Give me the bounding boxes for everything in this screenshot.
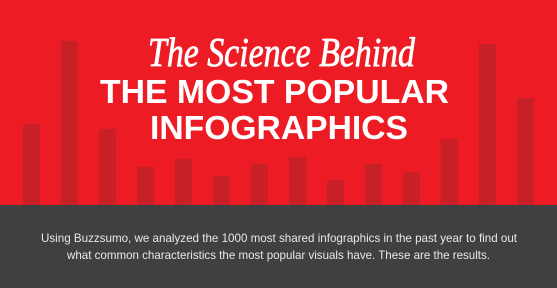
panel: red hero background xyxy=(0,0,557,205)
intro line 2: what common characteristics the most popular visuals have. These are the results. xyxy=(66,248,490,262)
bar chart backdrop xyxy=(23,41,534,205)
panel: dark intro band xyxy=(0,205,557,288)
title: the most popular: THE MOST POPULAR xyxy=(100,74,449,111)
title: infographics: INFOGRAPHICS xyxy=(150,110,408,147)
intro text xyxy=(41,231,518,262)
title: script line: The Science Behind xyxy=(148,29,415,75)
intro line 1: Using Buzzsumo, we analyzed the 1000 most shared infographics in the past year to find out xyxy=(41,231,518,245)
